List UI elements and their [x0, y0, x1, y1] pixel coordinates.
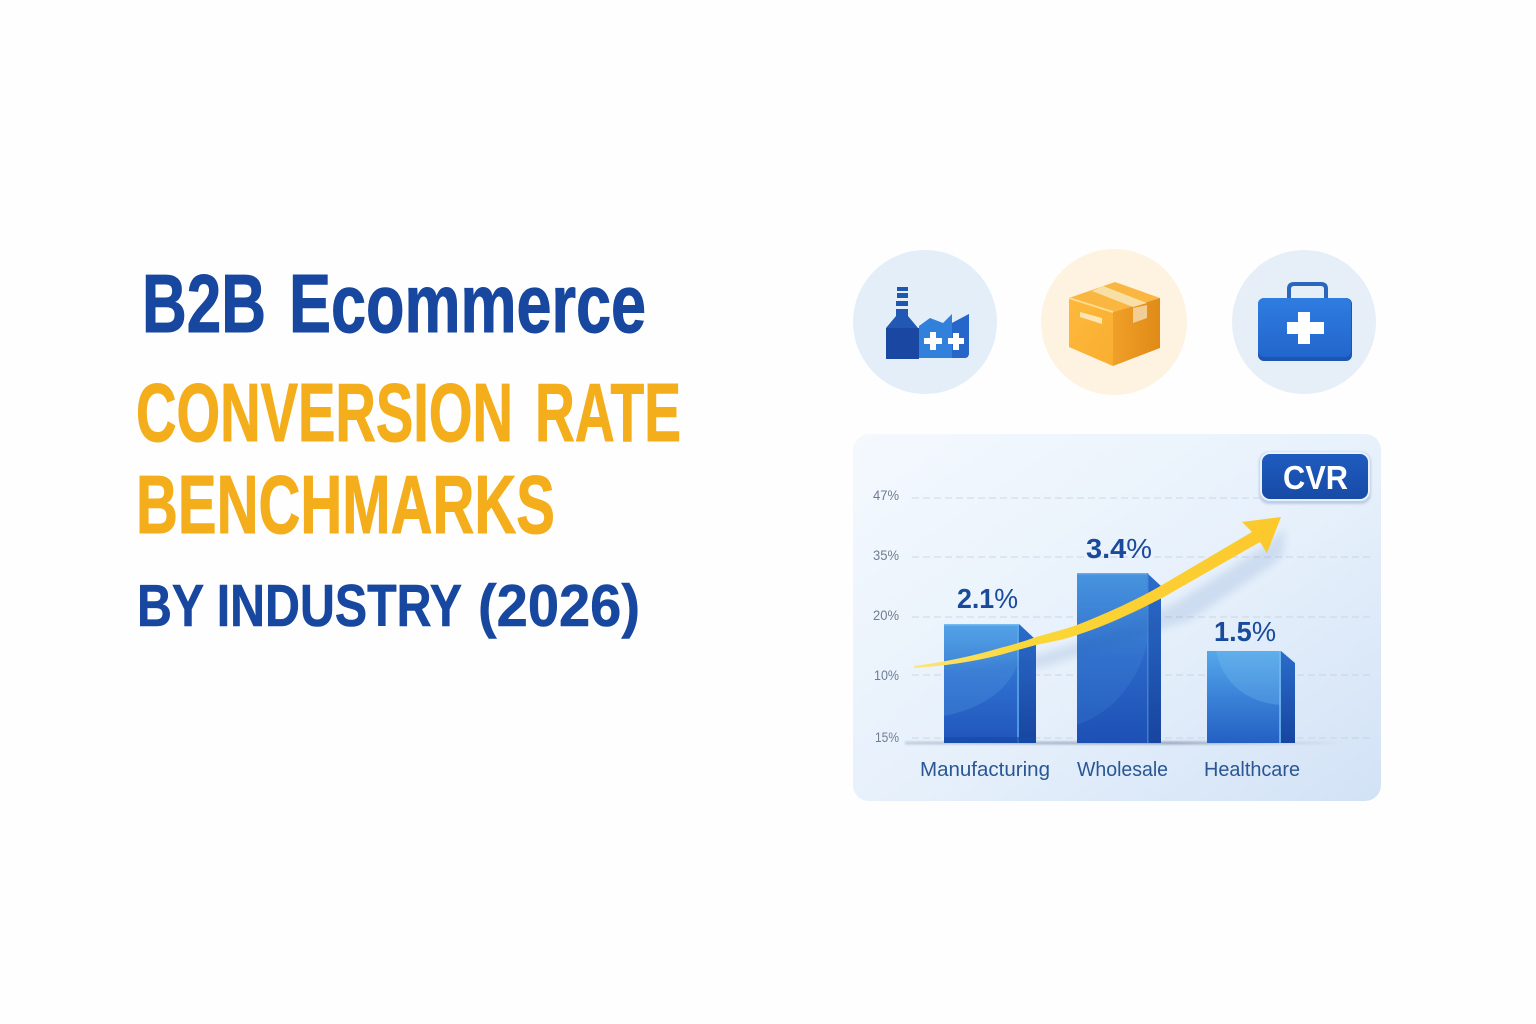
subtitle: By Industry (2026): BY INDUSTRY — [137, 573, 462, 639]
title: Conversion Rate: RATE — [535, 366, 681, 459]
bar: Wholesale — [1077, 573, 1161, 743]
icon: cardboard box — [1041, 249, 1187, 395]
title: Benchmarks: BENCHMARKS — [136, 458, 555, 551]
value label: 3.4%: 3.4% — [1086, 533, 1152, 564]
category label: Healthcare: Healthcare — [1204, 759, 1300, 781]
panel: conversion rate bar chart — [853, 434, 1381, 801]
title: B2B Ecommerce: B2B — [142, 257, 266, 350]
subtitle: By Industry (2026): (2026) — [478, 573, 640, 639]
y-axis gridlines and labels: 35% — [873, 547, 899, 563]
title: B2B Ecommerce — [142, 257, 646, 350]
icon: factory — [853, 250, 997, 394]
badge: CVR: CVR — [1283, 459, 1348, 496]
chart baseline — [905, 742, 1345, 744]
title: Conversion Rate: CONVERSION — [136, 366, 513, 459]
category label: Wholesale: Wholesale — [1077, 759, 1168, 781]
growth arrow — [914, 517, 1281, 668]
bar: Healthcare — [1207, 651, 1295, 743]
bar: Manufacturing — [944, 624, 1036, 743]
title: B2B Ecommerce: Ecommerce — [289, 257, 646, 350]
arrow shadow — [930, 528, 1285, 676]
category label: Manufacturing: Manufacturing — [920, 759, 1050, 781]
y-axis gridlines and labels: 20% — [873, 607, 899, 623]
y-axis gridlines and labels — [873, 487, 1372, 745]
value label: 1.5%: 1.5% — [1214, 616, 1276, 647]
badge: CVR — [1259, 452, 1371, 504]
value label: 2.1%: 2.1% — [957, 583, 1018, 614]
y-axis gridlines and labels: 47% — [873, 487, 899, 503]
y-axis gridlines and labels: 15% — [875, 729, 899, 745]
icon: medical case — [1232, 250, 1376, 394]
y-axis gridlines and labels: 10% — [874, 667, 899, 683]
